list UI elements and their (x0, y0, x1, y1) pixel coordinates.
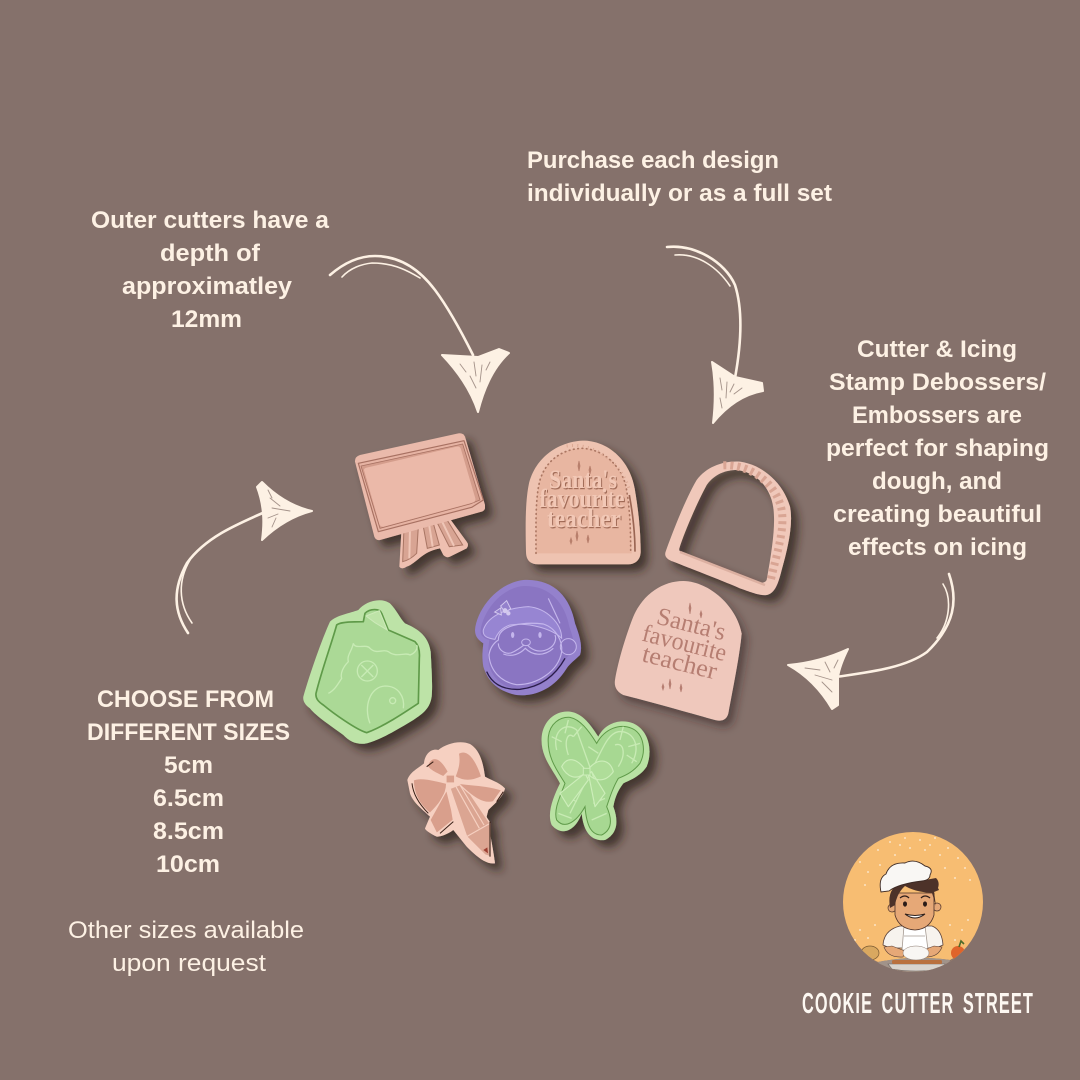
easel board body (355, 433, 485, 540)
text: size options: 10cm (156, 851, 220, 878)
rolling board (892, 960, 942, 964)
text: other sizes note: Other sizes available (68, 917, 304, 944)
text: purchase options (527, 147, 832, 207)
santa hat (483, 607, 562, 639)
shirt (883, 926, 943, 948)
pencil body (450, 783, 490, 857)
product: fondant arch with debossed text (615, 581, 742, 721)
rope ridges (567, 445, 630, 492)
chef hat (880, 861, 931, 892)
table (878, 958, 950, 972)
text: debossers and embossers: effects on icing (848, 534, 1027, 561)
cane inner (548, 717, 643, 835)
text: size options: 6.5cm (153, 785, 224, 812)
product: easel cutter (355, 433, 485, 568)
text: outer cutter depth: approximatley (122, 273, 293, 300)
santa inner (481, 586, 574, 689)
tomato (951, 941, 965, 960)
ears (888, 903, 941, 912)
window (357, 661, 377, 681)
text: size options: CHOOSE FROM (97, 686, 274, 713)
inner wall shade (629, 495, 635, 552)
hair (889, 878, 939, 908)
debossed lettering: favourite (639, 620, 729, 667)
house inner (316, 610, 419, 733)
rope texture (723, 465, 782, 581)
santa face (489, 598, 562, 685)
text: debossers and embossers: dough, and (872, 468, 1002, 495)
cane stripes (552, 720, 640, 820)
product: purple santa cutter (475, 580, 581, 695)
cane bow (560, 760, 613, 807)
flour speckles (854, 837, 971, 941)
text: outer cutter depth: Outer cutters have a (91, 207, 330, 234)
dough (903, 946, 929, 960)
sparkles (570, 461, 591, 544)
stamp lettering: teacher (547, 504, 621, 533)
lower cut-away (874, 956, 958, 972)
text: debossers and embossers: perfect for shaping (826, 435, 1049, 462)
product: bow pencil cutter (407, 742, 505, 864)
cookie (861, 946, 879, 960)
debossed sparkles (662, 603, 702, 692)
face (895, 893, 934, 930)
infographic canvas (69, 150, 1048, 1014)
text: debossers and embossers: creating beautiful (833, 501, 1042, 528)
santa pompom (560, 639, 576, 655)
text: outer cutter depth: 12mm (171, 306, 242, 333)
stamp face (536, 448, 632, 553)
door (367, 686, 404, 723)
easel inner groove (361, 444, 480, 528)
santa eyes and nose (511, 632, 542, 646)
text: debossers and embossers (826, 336, 1049, 561)
text: other sizes note (68, 917, 304, 977)
text: purchase options: individually or as a full set (527, 180, 832, 207)
debossed lettering: Santa's (654, 603, 728, 646)
roof scallops (328, 643, 417, 693)
easel board rim (358, 441, 483, 532)
stamp base (526, 441, 641, 564)
stamp lettering: favourite (540, 484, 624, 513)
easel legs (399, 517, 468, 568)
easel board panel (364, 447, 475, 527)
product: arch outline cutter (665, 462, 791, 595)
arrow: to easel top (330, 256, 509, 412)
chimney (366, 611, 387, 630)
logo backdrop (840, 830, 986, 976)
holly (495, 601, 511, 615)
text: size options: 8.5cm (153, 818, 224, 845)
debossed lettering (635, 601, 734, 686)
scalloped edge (536, 448, 631, 553)
product: candy cane cutter (542, 711, 650, 840)
text: debossers and embossers: Cutter & Icing (857, 336, 1017, 363)
product: arch stamp with text (526, 441, 641, 564)
bow loops (413, 752, 502, 833)
text: debossers and embossers: Stamp Debossers/ (829, 369, 1046, 396)
text: outer cutter depth: depth of (160, 240, 261, 267)
arrow: to easel left (177, 482, 312, 633)
text: other sizes note: upon request (112, 950, 266, 977)
arrow: to cutter (667, 247, 763, 423)
arrow: to icing stamp (788, 574, 954, 709)
arms (884, 946, 942, 957)
santa beard edge (487, 658, 565, 689)
inner rim (680, 552, 765, 585)
text: outer cutter depth (91, 207, 330, 333)
text: size options: 5cm (164, 752, 213, 779)
smile (905, 914, 925, 918)
bow shadow lines (412, 762, 503, 833)
logo: chef badge (840, 830, 986, 976)
plate (888, 964, 945, 971)
text: size options (87, 686, 290, 878)
debossed lettering: teacher (639, 641, 720, 685)
text: size options: DIFFERENT SIZES (87, 719, 290, 746)
stamp lettering (540, 465, 624, 533)
text: debossers and embossers: Embossers are (852, 402, 1022, 429)
text: purchase options: Purchase each design (527, 147, 779, 174)
product: green house cutter (303, 600, 432, 744)
apron (902, 926, 928, 950)
chef (880, 861, 943, 964)
eyes and brows (900, 896, 930, 907)
stamp lettering: Santa's (549, 465, 617, 494)
